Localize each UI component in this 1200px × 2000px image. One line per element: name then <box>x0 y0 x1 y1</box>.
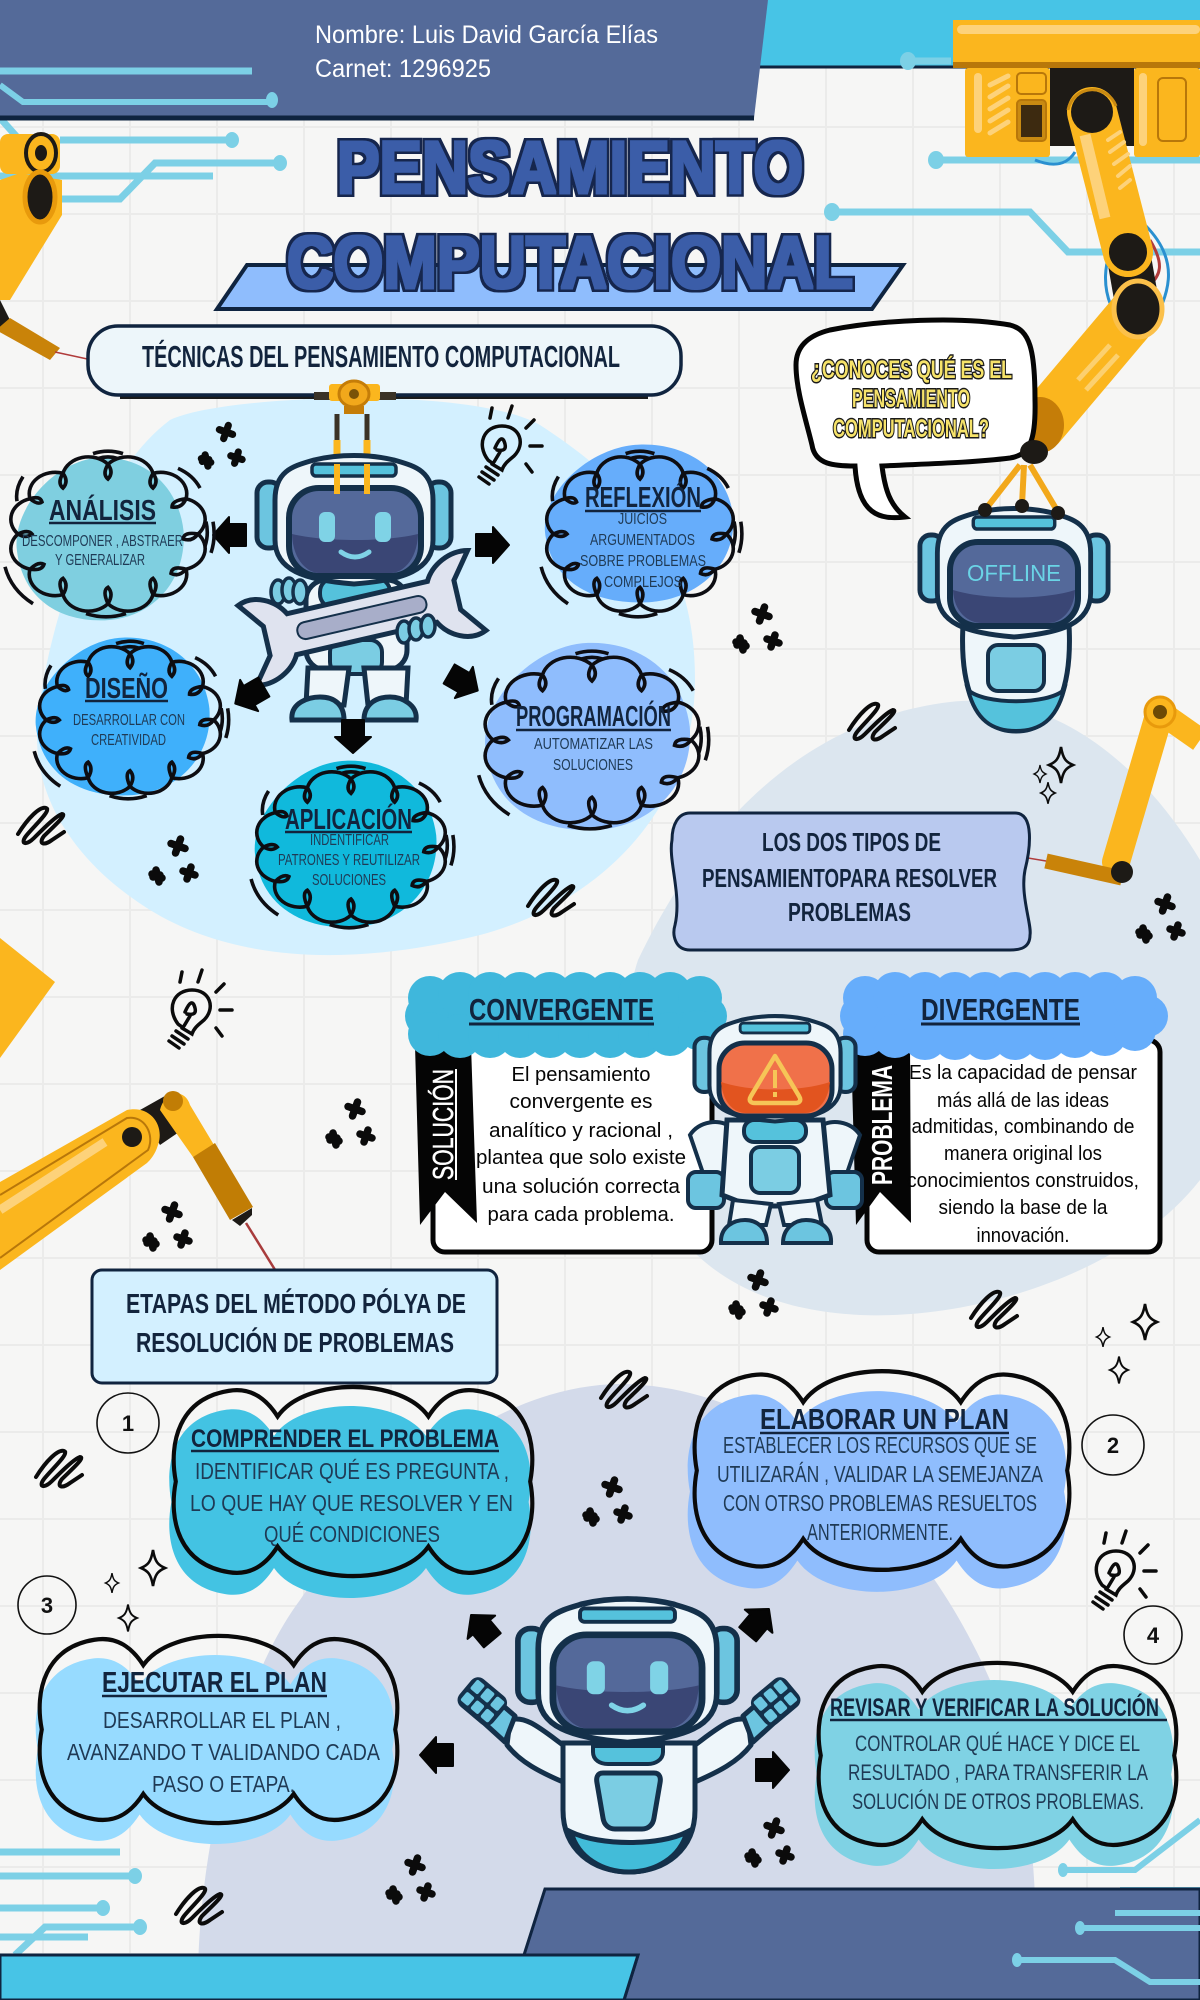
box: etapas <box>92 1270 497 1383</box>
text: convergente: analítico y racional , <box>489 1119 673 1142</box>
sparkle cluster <box>736 607 779 650</box>
sparkle cluster <box>146 1205 189 1248</box>
cloud: aplicación: APLICACIÓN <box>285 802 412 836</box>
step: ejecutar <box>36 1636 397 1844</box>
heading: los dos tipos <box>702 827 997 927</box>
gripper <box>314 381 396 492</box>
cloud: reflexión: SOBRE PROBLEMAS <box>580 553 706 570</box>
circuit lines on footer <box>1012 1913 1200 1982</box>
sparkle cluster <box>152 839 195 882</box>
sparkle cluster <box>586 1480 629 1523</box>
squiggle <box>528 880 574 915</box>
arrows around robot <box>213 517 509 753</box>
sparkle cluster <box>748 1821 791 1864</box>
cloud: análisis: Y GENERALIZAR <box>55 552 145 569</box>
speech bubble text: ¿CONOCES QUÉ ES EL <box>811 355 1012 384</box>
heading: convergente: CONVERGENTE <box>469 992 654 1027</box>
step: ejecutar: DESARROLLAR EL PLAN , <box>103 1707 341 1733</box>
cloud: programación: AUTOMATIZAR LAS <box>534 736 653 753</box>
footer: cyan band <box>0 1955 638 2000</box>
cloud: divergente <box>840 972 1168 1060</box>
text: convergente <box>476 1063 686 1226</box>
text: divergente: manera original los <box>944 1142 1102 1165</box>
step: comprender: IDENTIFICAR QUÉ ES PREGUNTA , <box>195 1458 509 1484</box>
cloud: diseño: DISEÑO <box>85 671 168 705</box>
robot offline <box>920 440 1108 731</box>
robot offline: OFFLINE <box>967 560 1061 586</box>
cloud: análisis <box>5 451 214 620</box>
arrows around lower robot <box>420 1597 789 1788</box>
sparkle cluster <box>732 1273 775 1316</box>
title <box>287 126 853 304</box>
cloud: reflexión: COMPLEJOS <box>604 574 682 591</box>
circuit lines bottom right top <box>1058 1820 1200 1890</box>
step: elaborar: ANTERIORMENTE. <box>807 1519 953 1545</box>
text: divergente: Es la capacidad de pensar <box>909 1061 1137 1084</box>
heading: divergente: DIVERGENTE <box>921 992 1080 1027</box>
cloud: reflexión <box>541 445 742 617</box>
cloud: aplicación <box>251 761 454 928</box>
robot arm mid right <box>1010 697 1200 883</box>
step: comprender: LO QUE HAY QUE RESOLVER Y EN <box>190 1490 513 1516</box>
cloud: aplicación: SOLUCIONES <box>312 872 386 889</box>
step: elaborar: ESTABLECER LOS RECURSOS QUE SE <box>723 1432 1037 1458</box>
text: divergente: admitidas, combinando de <box>912 1115 1134 1138</box>
step: ejecutar: AVANZANDO T VALIDANDO CADA <box>67 1739 381 1765</box>
author name: Nombre: Luis David García Elías <box>315 21 658 49</box>
step: comprender: QUÉ CONDICIONES <box>264 1521 440 1547</box>
number 2: 2 <box>1107 1433 1119 1458</box>
title: PENSAMIENTO <box>337 126 803 209</box>
icon: lightbulb middle <box>169 970 232 1048</box>
step: elaborar <box>688 1371 1069 1592</box>
robot arm top left <box>0 134 92 360</box>
carnet: Carnet: 1296925 <box>315 55 491 83</box>
heading: los dos tipos: PENSAMIENTOPARA RESOLVER <box>702 863 997 893</box>
stars right <box>1096 1304 1157 1384</box>
sparkle cluster <box>389 1858 432 1901</box>
cloud: programación <box>479 643 709 830</box>
text: convergente: para cada problema. <box>488 1203 674 1226</box>
number 2 <box>1082 1415 1144 1475</box>
cloud: reflexión: JUICIOS <box>618 511 667 528</box>
robot warning <box>688 1016 862 1243</box>
cloud: diseño: DESARROLLAR CON <box>73 712 185 729</box>
heading: etapas: ETAPAS DEL MÉTODO PÓLYA DE <box>126 1288 466 1319</box>
footer: navy band <box>524 1889 1200 2000</box>
number 1 <box>97 1393 159 1453</box>
step: comprender: COMPRENDER EL PROBLEMA <box>191 1425 499 1453</box>
title: COMPUTACIONAL <box>287 221 853 304</box>
heading: los dos tipos: LOS DOS TIPOS DE <box>762 827 941 857</box>
stars left <box>105 1550 165 1632</box>
techniques box <box>88 326 681 395</box>
icon: lightbulb lower <box>1093 1531 1156 1609</box>
squiggle <box>176 1888 222 1923</box>
ribbon: solución: SOLUCIÓN <box>427 1069 460 1180</box>
techniques heading: TÉCNICAS DEL PENSAMIENTO COMPUTACIONAL <box>142 339 620 374</box>
background blob: lavender <box>198 1384 1035 2000</box>
number 4 <box>1124 1606 1182 1664</box>
squiggle <box>18 808 64 843</box>
header: navy banner <box>0 0 768 118</box>
shadow line under techniques box <box>120 393 648 399</box>
sparkle cluster <box>329 1102 372 1145</box>
step: elaborar: UTILIZARÁN , VALIDAR LA SEMEJANZA <box>717 1461 1043 1487</box>
background blob: light blue <box>37 398 695 955</box>
step: elaborar: ELABORAR UN PLAN <box>760 1404 1009 1436</box>
stars <box>1034 747 1073 804</box>
squiggle <box>601 1372 647 1407</box>
cloud: convergente <box>405 972 727 1058</box>
speech bubble text <box>811 355 1012 443</box>
heading: etapas <box>126 1288 466 1358</box>
text: convergente: plantea que solo existe <box>476 1146 686 1169</box>
step: elaborar: CON OTRSO PROBLEMAS RESUELTOS <box>723 1490 1037 1516</box>
heading: etapas: RESOLUCIÓN DE PROBLEMAS <box>136 1327 454 1358</box>
card: convergente <box>433 1040 712 1252</box>
text: convergente: El pensamiento <box>512 1063 650 1086</box>
number 4: 4 <box>1147 1623 1160 1648</box>
background blob: grey <box>623 701 1200 1315</box>
circuit lines top <box>0 118 1200 252</box>
cloud: reflexión: ARGUMENTADOS <box>590 532 695 549</box>
text: divergente: siendo la base de la <box>938 1196 1108 1219</box>
robot arm top right <box>1016 225 1168 453</box>
robot arm mid left <box>0 1091 277 1273</box>
number 3 <box>18 1576 76 1634</box>
text: divergente: conocimientos construidos, <box>907 1169 1139 1192</box>
ribbon: problema <box>851 1045 911 1225</box>
cloud: programación: SOLUCIONES <box>553 757 633 774</box>
cloud: análisis: ANÁLISIS <box>49 493 156 527</box>
sparkle cluster <box>1139 897 1182 940</box>
step: ejecutar: EJECUTAR EL PLAN <box>102 1667 327 1699</box>
sparkle cluster <box>201 425 242 466</box>
cloud: reflexión: REFLEXIÓN <box>585 480 701 514</box>
text: convergente: convergente es <box>510 1090 652 1113</box>
text: divergente <box>907 1061 1139 1247</box>
step: comprender <box>169 1387 532 1598</box>
header: cyan band <box>746 0 1200 70</box>
cloud: diseño <box>34 638 229 799</box>
speech bubble text: PENSAMIENTO <box>852 385 970 413</box>
text: divergente: innovación. <box>976 1224 1070 1247</box>
cloud: programación: PROGRAMACIÓN <box>516 699 671 733</box>
box: los dos tipos <box>671 813 1030 950</box>
yellow diamond <box>0 938 55 1058</box>
speech bubble <box>796 320 1035 518</box>
number 1: 1 <box>122 1411 134 1436</box>
step: revisar <box>815 1663 1176 1869</box>
text: convergente: una solución correcta <box>482 1175 681 1198</box>
icon: lightbulb top <box>479 406 542 484</box>
yellow machine <box>953 20 1200 274</box>
heading: los dos tipos: PROBLEMAS <box>788 897 911 927</box>
cloud: diseño: CREATIVIDAD <box>91 732 166 749</box>
squiggle <box>36 1451 82 1486</box>
squiggle <box>849 704 895 739</box>
squiggle <box>971 1292 1017 1327</box>
robot arms up <box>454 1599 804 1872</box>
card: divergente <box>867 1040 1160 1252</box>
number 3: 3 <box>41 1593 53 1618</box>
ribbon: problema: PROBLEMA <box>867 1065 899 1185</box>
cloud: aplicación: INDENTIFICAR <box>310 832 389 849</box>
cloud: análisis: DESCOMPONER , ABSTRAER <box>22 533 183 550</box>
step: ejecutar: PASO O ETAPA. <box>152 1771 295 1797</box>
ribbon: solución <box>415 1045 477 1225</box>
speech bubble text: COMPUTACIONAL? <box>833 415 989 443</box>
cloud: aplicación: PATRONES Y REUTILIZAR <box>278 852 420 869</box>
circuit lines bottom left <box>0 1852 147 1955</box>
robot with wrench <box>237 456 487 720</box>
title banner <box>217 265 903 309</box>
text: divergente: más allá de las ideas <box>937 1089 1109 1112</box>
